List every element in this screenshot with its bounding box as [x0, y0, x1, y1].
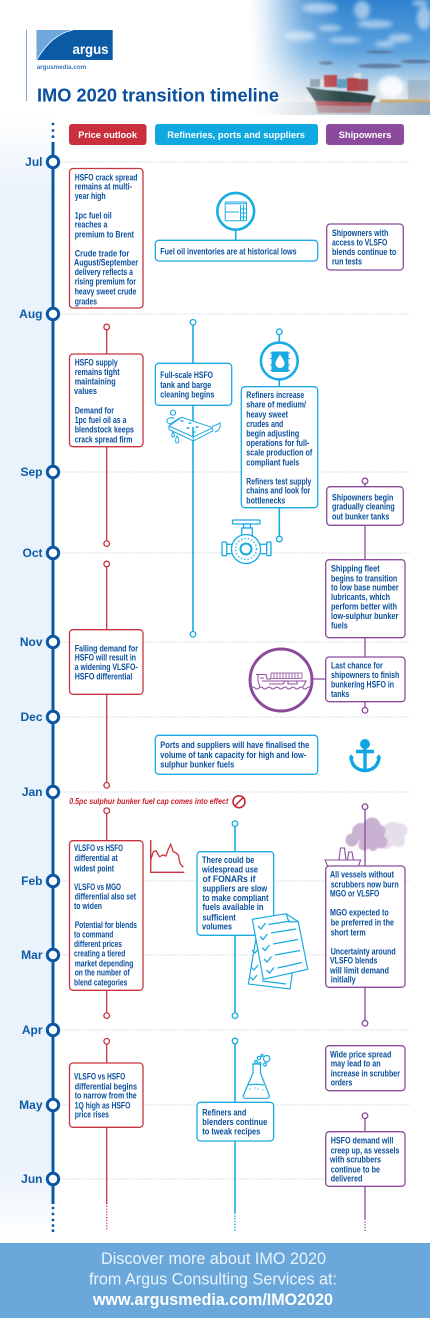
panel: tank and barge cleaning [155, 363, 232, 405]
heading pill: refineries: Refineries, ports and suppliers [167, 130, 305, 141]
panel: fuel oil inventories [155, 240, 318, 261]
panel: HSFO supply: remains tight [75, 367, 120, 377]
panel: HSFO supply [70, 354, 143, 447]
panel: shipowners cleaning tanks: Shipowners begin [332, 492, 394, 502]
panel: HSFO crack spread: 1pc fuel oil [75, 210, 112, 220]
month labels: Dec [20, 710, 43, 724]
panel: falling demand for HSFO: HSFO will result in [75, 652, 136, 662]
panel: vessels without scrubbers: Uncertainty around [331, 946, 396, 956]
footer banner: www.argusmedia.com/IMO2020 [92, 1290, 333, 1309]
icon: prohibited sign [233, 796, 245, 808]
panel: last chance for bunkering: tanks [331, 689, 349, 699]
panel: falling demand for HSFO: HSFO differential [75, 671, 132, 681]
panel: shipping fleet lubricants: to low base number [331, 582, 399, 592]
header photo: container ship [250, 0, 430, 115]
panel: shipowners run tests [327, 224, 403, 270]
panel: refiners tweak recipes: to tweak recipes [202, 1126, 260, 1136]
icon: ship in circle [250, 649, 312, 711]
panel: differential at widest point: to widen [74, 901, 102, 911]
panel: differential at widest point: VLSFO vs HSFO [74, 843, 123, 853]
panel: vessels without scrubbers: MGO or VLSFO [330, 888, 379, 898]
panel: HSFO demand will creep up: with scrubbers [329, 1154, 381, 1164]
panel: wide price spread: Wide price spread [330, 1049, 391, 1059]
callout: sulphur cap: 0.5pc sulphur bunker fuel cap comes into effect [69, 796, 229, 806]
panel: tank and barge cleaning: tank and barge [160, 380, 211, 390]
panel: HSFO supply: HSFO supply [75, 357, 118, 367]
panel: widespread use of FONARs: widespread use [201, 864, 258, 874]
panel: refiners increase share: scale production of [246, 447, 313, 457]
panel: ports and suppliers: sulphur bunker fuels [160, 759, 234, 769]
panel: refiners tweak recipes [197, 1102, 274, 1141]
panel: falling demand for HSFO [70, 630, 143, 694]
panel: vessels without scrubbers: be preferred in the [331, 917, 394, 927]
panel: HSFO crack spread: grades [75, 296, 97, 306]
panel: vessels without scrubbers: MGO expected to [330, 907, 389, 917]
icon: storage tank [217, 193, 254, 230]
month labels [19, 155, 43, 1186]
panel: shipowners cleaning tanks [327, 487, 403, 525]
icon: valve [222, 520, 271, 564]
panel: differential begins to narrow: price rises [75, 1109, 109, 1119]
panel: refiners tweak recipes: Refiners and [202, 1107, 246, 1117]
panel: refiners tweak recipes: blenders continue [202, 1117, 267, 1127]
month labels: Oct [22, 546, 42, 560]
panel: falling demand for HSFO: a widening VLSFO- [75, 662, 138, 672]
panel: differential at widest point: on the number of [75, 967, 130, 977]
panel: differential at widest point: differential also set [75, 891, 136, 901]
panel: wide price spread: may lead to an [331, 1058, 381, 1068]
heading pill: refineries [155, 124, 318, 145]
panel: HSFO supply: Demand for [75, 405, 114, 415]
panel: vessels without scrubbers: will limit demand [329, 965, 389, 975]
panel: ports and suppliers [155, 735, 318, 774]
panel: HSFO crack spread [70, 168, 143, 308]
panel: widespread use of FONARs: to make compliant [202, 893, 268, 903]
panel: refiners increase share: Refiners test supply [246, 476, 312, 486]
panel: HSFO supply: blendstock keeps [75, 424, 134, 434]
month labels: Jul [25, 155, 42, 169]
panel: HSFO demand will creep up [326, 1132, 405, 1186]
panel: tank and barge cleaning: cleaning begins [160, 389, 214, 399]
cloud of exhaust [346, 818, 408, 851]
footer banner [0, 1243, 430, 1318]
panel: HSFO crack spread: reaches a [75, 220, 108, 230]
panel: tank and barge cleaning: Full-scale HSFO [160, 370, 213, 380]
panel: HSFO crack spread: Crude trade for [75, 248, 130, 258]
heading pill: shipowners: Shipowners [339, 130, 391, 141]
panel: refiners increase share [241, 387, 318, 508]
panel: ports and suppliers: volume of tank capacity for high and low- [160, 750, 306, 760]
month labels: Mar [21, 948, 43, 962]
month labels: Feb [21, 874, 42, 888]
panel: last chance for bunkering: shipowners to finish [331, 670, 400, 680]
title: IMO 2020 transition timeline [37, 86, 279, 106]
panel: HSFO crack spread: HSFO crack spread [75, 172, 137, 182]
panel: HSFO crack spread: year high [75, 191, 106, 201]
icon: barge cleaning [167, 410, 220, 443]
connector lines: shipowners [313, 478, 368, 1231]
panel: widespread use of FONARs: fuels available in [202, 902, 264, 912]
panel: HSFO supply: 1pc fuel oil as a [75, 415, 127, 425]
panel: differential at widest point: to command [74, 929, 113, 939]
panel: refiners increase share: Refiners increase [246, 390, 304, 400]
month labels: Apr [22, 1023, 43, 1037]
panel: shipowners run tests: blends continue to [332, 247, 397, 257]
panel: refiners increase share: share of medium/ [246, 399, 306, 409]
header rule [26, 30, 27, 101]
panel: vessels without scrubbers: VLSFO blends [330, 955, 377, 965]
panel: shipping fleet lubricants [326, 560, 405, 638]
panel: last chance for bunkering: Last chance for [331, 660, 383, 670]
footer banner: Discover more about IMO 2020 [101, 1249, 326, 1268]
panel: refiners increase share: begin adjusting [246, 428, 299, 438]
argus logo: argus [72, 42, 108, 57]
panel: widespread use of FONARs [197, 852, 274, 935]
panel: differential begins to narrow [70, 1063, 143, 1127]
panel: differential begins to narrow: 1Q high as HSFO [75, 1100, 130, 1110]
icon: line chart [151, 840, 184, 872]
panel: HSFO demand will creep up: creep up, as vessels [331, 1145, 399, 1155]
panel: shipping fleet lubricants: begins to transition [331, 573, 398, 583]
icon: oil barrel [261, 343, 298, 379]
panel: differential begins to narrow: differential begins [75, 1081, 137, 1091]
panel: falling demand for HSFO: Falling demand for [75, 643, 138, 653]
panel: shipping fleet lubricants: lubricants, which [331, 592, 390, 602]
panel: shipping fleet lubricants: low-sulphur bunker [331, 611, 399, 621]
panel: vessels without scrubbers: All vessels without [330, 869, 394, 879]
panel: vessels without scrubbers [326, 866, 405, 987]
panel: differential at widest point: VLSFO vs MGO [74, 882, 121, 892]
connector lines: price outlook [104, 324, 109, 1231]
panel: fuel oil inventories: Fuel oil inventories are at historical lows [160, 246, 297, 256]
icon: anchor [349, 739, 381, 771]
heading pill: shipowners [326, 124, 404, 145]
panel: widespread use of FONARs: volumes [202, 921, 232, 931]
main timeline axis [47, 123, 59, 1232]
argus logo [37, 30, 113, 60]
month labels: Aug [19, 307, 42, 321]
panel: widespread use of FONARs: of FONARs if [202, 874, 256, 884]
panel: HSFO demand will creep up: HSFO demand will [331, 1135, 393, 1145]
panel: refiners increase share: heavy sweet [246, 409, 288, 419]
panel: shipping fleet lubricants: fuels [331, 620, 348, 630]
panel: HSFO crack spread: remains at multi- [75, 181, 132, 191]
month labels: May [19, 1098, 43, 1112]
footer banner: from Argus Consulting Services at: [89, 1270, 337, 1288]
panel: shipping fleet lubricants: perform better with [331, 601, 397, 611]
logo url: argusmedia.com [37, 64, 86, 71]
connector lines: refineries [190, 230, 282, 1231]
panel: differential at widest point [70, 841, 143, 990]
panel: differential at widest point: widest point [73, 863, 114, 873]
month labels: Nov [20, 635, 43, 649]
panel: vessels without scrubbers: short term [331, 927, 366, 937]
month labels: Jan [22, 785, 42, 799]
panel: wide price spread: orders [331, 1077, 352, 1087]
panel: differential at widest point: differential at [75, 853, 118, 863]
heading pill: price outlook: Price outlook [78, 130, 138, 141]
panel: HSFO demand will creep up: continue to be [331, 1164, 380, 1174]
panel: differential at widest point: creating a tiered [74, 948, 125, 958]
panel: refiners increase share: compliant fuels [246, 457, 299, 467]
panel: shipowners cleaning tanks: out bunker tanks [332, 511, 389, 521]
panel: differential at widest point: market depending [75, 958, 133, 968]
panel: differential at widest point: different prices [74, 939, 122, 949]
panel: refiners increase share: chains and look for [246, 485, 311, 495]
panel: differential at widest point: blend categories [74, 977, 127, 987]
panel: differential begins to narrow: to narrow from the [75, 1090, 137, 1100]
panel: last chance for bunkering [326, 657, 405, 702]
panel: vessels without scrubbers: initially [331, 975, 356, 985]
month labels: Jun [21, 1172, 42, 1186]
panel: HSFO supply: values [74, 386, 97, 396]
panel: shipping fleet lubricants: Shipping fleet [331, 563, 380, 573]
panel: shipowners cleaning tanks: gradually cleaning [332, 502, 395, 512]
panel: HSFO crack spread: delivery reflects a [75, 267, 134, 277]
panel: HSFO supply: crack spread firm [75, 434, 132, 444]
panel: differential at widest point: Potential for blends [75, 920, 137, 930]
panel: widespread use of FONARs: There could be [202, 855, 254, 865]
panel: last chance for bunkering: bunkering HSFO in [331, 679, 394, 689]
panel: wide price spread: increase in scrubber [331, 1068, 400, 1078]
panel: HSFO crack spread: rising premium for [75, 276, 136, 286]
panel: refiners increase share: operations for full- [246, 438, 309, 448]
panel: HSFO crack spread: premium to Brent [75, 229, 134, 239]
panel: HSFO crack spread: heavy sweet crude [75, 286, 136, 296]
panel: shipowners run tests: Shipowners with [332, 228, 389, 238]
panel: shipowners run tests: access to VLSFO [332, 237, 387, 247]
icon: flask [243, 1054, 270, 1098]
month labels: Sep [20, 465, 42, 479]
panel: ports and suppliers: Ports and suppliers will have finalised the [160, 740, 309, 750]
panel: widespread use of FONARs: suppliers are slow [202, 883, 268, 893]
left background band [0, 115, 53, 1243]
panel: widespread use of FONARs: sufficient [202, 912, 236, 922]
panel: shipowners run tests: run tests [332, 256, 362, 266]
panel: HSFO supply: maintaining [75, 376, 116, 386]
panel: HSFO crack spread: August/September [74, 258, 138, 268]
heading pill: price outlook [69, 124, 146, 145]
panel: differential begins to narrow: VLSFO vs HSFO [74, 1071, 125, 1081]
panel: HSFO demand will creep up: delivered [331, 1173, 362, 1183]
panel: refiners increase share: crudes and [246, 419, 283, 429]
panel: refiners increase share: bottlenecks [246, 495, 285, 505]
panel: wide price spread [326, 1046, 405, 1091]
panel: vessels without scrubbers: scrubbers now burn [331, 879, 399, 889]
icon: checklist documents [248, 914, 308, 989]
icon: funnel and deck [325, 848, 361, 867]
